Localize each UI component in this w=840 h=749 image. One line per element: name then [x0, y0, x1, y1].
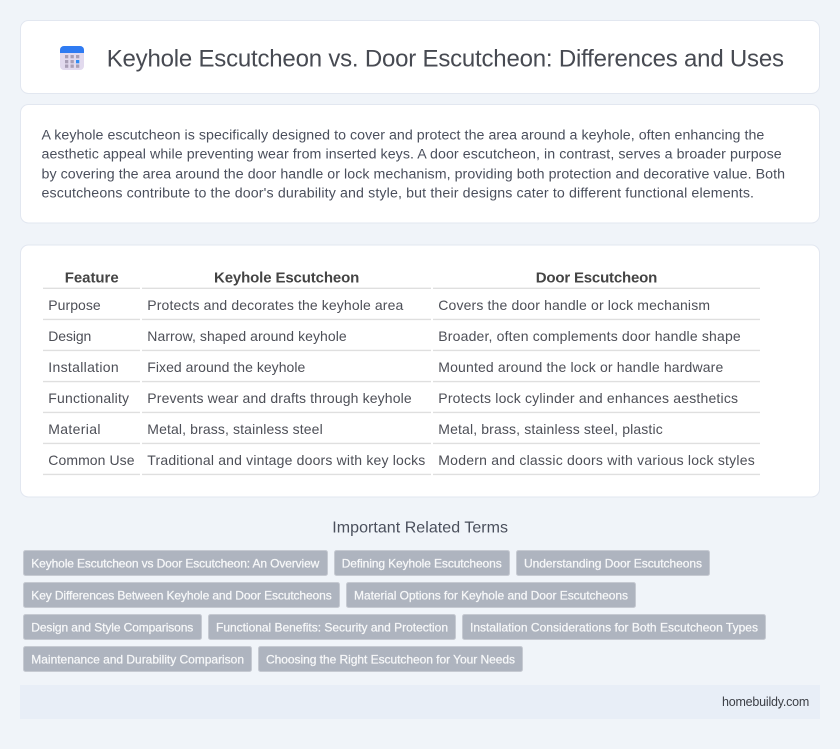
text block: intro: A keyhole escutcheon is specifically designed to cover and protect the area around a keyhole, often enhancing the — [42, 127, 764, 143]
tag — [24, 614, 202, 640]
row: purpose: Covers the door handle or lock mechanism — [438, 297, 710, 313]
table header: Door Escutcheon — [536, 270, 657, 287]
panel: intro paragraph — [20, 104, 820, 223]
table header: Keyhole Escutcheon — [214, 270, 359, 287]
title: Keyhole Escutcheon vs. Door Escutcheon: Differences and Uses — [107, 46, 784, 73]
row: material: Metal, brass, stainless steel, plastic — [438, 421, 663, 437]
row: purpose: Protects and decorates the keyhole area — [147, 297, 404, 313]
footer — [20, 685, 820, 719]
row: installation: Installation — [48, 359, 119, 375]
row: purpose: Purpose — [48, 297, 101, 313]
row: common use: Common Use — [48, 452, 135, 468]
icon: calendar — [60, 46, 84, 70]
row: functionality — [48, 390, 738, 406]
row: purpose — [48, 297, 710, 313]
row: installation: Fixed around the keyhole — [147, 359, 306, 375]
footer source text: homebuildy.com — [722, 695, 809, 709]
row: installation: Mounted around the lock or handle hardware — [438, 359, 724, 375]
tag — [334, 550, 510, 576]
row: design: Narrow, shaped around keyhole — [147, 328, 347, 344]
row: installation — [48, 359, 724, 375]
tag — [208, 614, 456, 640]
tag: Maintenance and Durability Comparison — [31, 652, 244, 666]
tag: Understanding Door Escutcheons — [524, 556, 702, 570]
tag: Defining Keyhole Escutcheons — [342, 556, 502, 570]
tag — [24, 646, 252, 672]
row: functionality: Functionality — [48, 390, 129, 406]
row: material: Material — [48, 421, 100, 437]
row: common use: Modern and classic doors with various lock styles — [438, 452, 755, 468]
row: material: Metal, brass, stainless steel — [147, 421, 323, 437]
tag — [24, 582, 340, 608]
row: design — [48, 328, 741, 344]
panel: header — [20, 20, 820, 94]
table header: Feature — [65, 270, 119, 287]
row: common use — [48, 452, 755, 468]
heading: related terms: Important Related Terms — [332, 520, 508, 537]
text block: intro — [42, 127, 785, 201]
related term tags — [24, 550, 766, 672]
row: material — [48, 421, 663, 437]
tag — [346, 582, 636, 608]
tag: Choosing the Right Escutcheon for Your Needs — [266, 652, 515, 666]
table header — [65, 270, 657, 287]
tag: Installation Considerations for Both Escutcheon Types — [470, 620, 758, 634]
tag — [24, 550, 328, 576]
row: common use: Traditional and vintage doors with key locks — [147, 452, 425, 468]
tag — [462, 614, 766, 640]
tag — [258, 646, 522, 672]
row: design: Broader, often complements door handle shape — [438, 328, 741, 344]
text block: intro: escutcheons contribute to the door's durability and style, but their designs cater to different functional elements. — [42, 185, 754, 201]
text block: intro: aesthetic appeal while preventing wear from inserted keys. A door escutcheon, in contrast, serves a broader purpose — [42, 146, 782, 162]
tag: Material Options for Keyhole and Door Escutcheons — [354, 588, 628, 602]
tag: Design and Style Comparisons — [31, 620, 193, 634]
row: functionality: Prevents wear and drafts through keyhole — [147, 390, 412, 406]
row: functionality: Protects lock cylinder and enhances aesthetics — [438, 390, 738, 406]
tag: Functional Benefits: Security and Protection — [216, 620, 448, 634]
text block: intro: by covering the area around the door handle or lock mechanism, providing both protection and decorative value. Both — [42, 166, 785, 182]
tag — [516, 550, 710, 576]
row: design: Design — [48, 328, 91, 344]
tag: Key Differences Between Keyhole and Door Escutcheons — [31, 588, 332, 602]
panel: comparison table — [20, 245, 820, 497]
tag: Keyhole Escutcheon vs Door Escutcheon: An Overview — [31, 556, 320, 570]
